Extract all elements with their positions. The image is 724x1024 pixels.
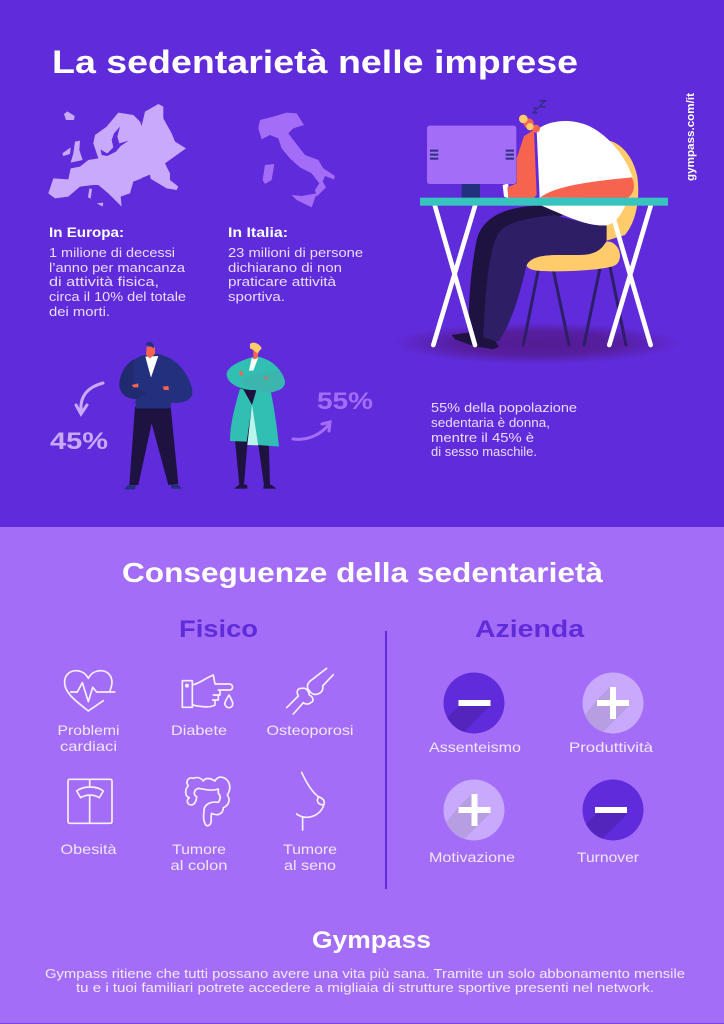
label: Tumore al seno xyxy=(283,841,337,873)
label: Tumore al colon: al colon xyxy=(170,857,228,873)
text block: In Italia xyxy=(228,225,363,304)
icon: osteoporosis joint xyxy=(287,668,333,714)
label: Assenteismo: Assenteismo xyxy=(429,739,521,755)
label: Problemi cardiaci xyxy=(58,722,120,754)
title: La sedentarietà nelle imprese xyxy=(52,44,578,80)
label: Problemi cardiaci: cardiaci xyxy=(60,738,117,754)
text block: In Europa: In Europa: xyxy=(49,225,124,240)
text block: In Italia: In Italia: xyxy=(228,225,288,240)
text block: population: 55% della popolazione xyxy=(431,400,577,415)
text block: Gympass description xyxy=(45,966,685,995)
heading: Fisico: Fisico xyxy=(179,616,258,643)
text block: In Europa xyxy=(49,225,186,319)
text block: In Italia: praticare attività xyxy=(228,274,337,289)
text block: In Europa: circa il 10% del totale xyxy=(49,289,186,304)
label: Turnover: Turnover xyxy=(577,849,639,865)
icon: heart xyxy=(65,671,115,711)
text block: population: sedentaria è donna, xyxy=(431,415,550,430)
map: Italy xyxy=(258,113,335,207)
heading: Azienda: Azienda xyxy=(475,616,585,643)
text block: Gympass description: tu e i tuoi familiari potrete accedere a migliaia di strutture sportive presenti nel network. xyxy=(76,980,654,995)
icon: minus Turnover xyxy=(582,780,644,840)
illustration: sleeping worker at desk xyxy=(393,101,680,364)
text block: In Europa: di attività fisica, xyxy=(49,274,159,289)
icon: weighing scale xyxy=(68,779,112,823)
label: Tumore al seno: Tumore xyxy=(283,841,337,857)
panel: top background xyxy=(0,0,724,527)
icon: breast xyxy=(297,772,324,830)
text block: population xyxy=(431,400,577,459)
map: Europe xyxy=(48,104,186,207)
vertical url: gympass.com/it xyxy=(685,93,697,181)
label: Motivazione: Motivazione xyxy=(429,849,515,865)
label: Osteoporosi: Osteoporosi xyxy=(266,722,354,738)
illustration: woman xyxy=(227,343,285,489)
heading: Gympass: Gympass xyxy=(312,927,431,954)
icon: plus Produttività xyxy=(582,672,644,734)
icon: colon xyxy=(186,777,230,826)
stat: 45 percent with arrow xyxy=(50,383,108,455)
icon: minus Assenteismo xyxy=(444,672,504,734)
stat: 55 percent with arrow xyxy=(293,388,373,439)
stat: 45 percent with arrow: 45% xyxy=(50,428,108,455)
text block: population: mentre il 45% è xyxy=(431,430,534,445)
text block: In Europa: 1 milione di decessi xyxy=(49,245,175,260)
text block: In Europa: l’anno per mancanza xyxy=(49,260,186,275)
heading: consequences: Conseguenze della sedentarietà xyxy=(122,557,603,588)
label: Diabete: Diabete xyxy=(171,722,227,738)
icon: sleep letters xyxy=(533,101,546,113)
stat: 55 percent with arrow: 55% xyxy=(317,388,373,415)
text block: population: di sesso maschile. xyxy=(431,444,537,459)
text block: In Italia: dichiarano di non xyxy=(228,260,342,275)
icon: plus Motivazione xyxy=(444,780,504,840)
text block: In Europa: dei morti. xyxy=(49,304,110,319)
text block: In Italia: sportiva. xyxy=(228,289,285,304)
label: Tumore al colon xyxy=(170,841,228,873)
text block: Gympass description: Gympass ritiene che tutti possano avere una vita più sana. Tramite un solo abbonamento mensile xyxy=(45,966,685,981)
text block: In Italia: 23 milioni di persone xyxy=(228,245,363,260)
panel: bottom background xyxy=(0,527,724,1024)
icon: diabetes hand xyxy=(182,675,233,708)
illustration: man xyxy=(119,342,192,489)
label: Tumore al colon: Tumore xyxy=(172,841,226,857)
label: Problemi cardiaci: Problemi xyxy=(58,722,120,738)
label: Produttività: Produttività xyxy=(569,739,653,755)
label: Obesità: Obesità xyxy=(60,841,117,857)
label: Tumore al seno: al seno xyxy=(284,857,336,873)
